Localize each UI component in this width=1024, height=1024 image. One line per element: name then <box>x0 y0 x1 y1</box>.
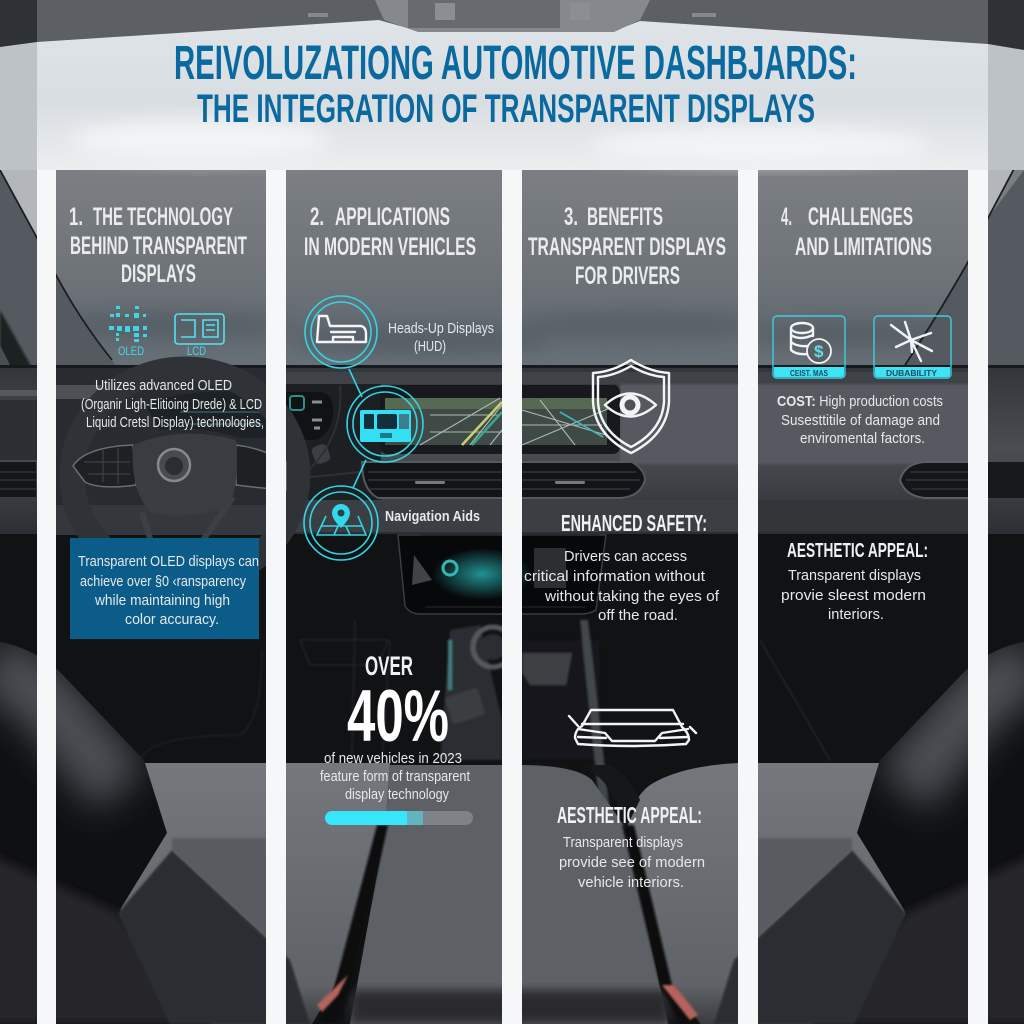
stat: 40 percent: feature form of transparent <box>320 768 471 785</box>
center vent <box>362 462 645 498</box>
heading: challenges <box>781 203 932 261</box>
icon: OLED: OLED <box>118 344 144 358</box>
text: aesthetic appeal: provie sleest modern <box>781 587 926 604</box>
heading: technology: THE TECHNOLOGY <box>93 203 233 231</box>
text: cost: enviromental factors. <box>800 430 925 447</box>
stat: 40 percent: OVER <box>365 651 413 681</box>
right seat cushion <box>627 763 905 1024</box>
heading: benefits: BENEFITS <box>587 203 663 231</box>
heading: technology: 1. <box>69 203 83 231</box>
text: enhanced safety: ENHANCED SAFETY: <box>561 510 707 536</box>
icon: LCD: LCD <box>187 344 206 358</box>
label: heads-up displays: (HUD) <box>414 338 446 355</box>
heading: applications: APPLICATIONS <box>335 203 450 231</box>
icon: OLED <box>109 306 147 358</box>
panel: the technology <box>69 203 264 639</box>
callout: OLED transparency: achieve over §0 ‹ransparency <box>80 573 246 590</box>
side vents <box>0 462 1024 498</box>
right pillar <box>890 170 1024 440</box>
heading: technology <box>69 203 247 288</box>
text: cost: Susesttitile of damage and <box>781 412 940 429</box>
icon: shield with eye <box>593 360 669 453</box>
text: technology description: Liquid Cretsl Display) technologies, <box>86 414 264 431</box>
left seat back <box>0 640 310 1024</box>
heading: benefits: FOR DRIVERS <box>575 262 680 290</box>
heading: benefits <box>528 203 726 290</box>
text: technology description: Utilizes advanced OLED <box>95 377 232 394</box>
heading: applications: IN MODERN VEHICLES <box>304 233 476 261</box>
text: enhanced safety: without taking the eyes of <box>544 588 720 605</box>
heading: applications <box>304 203 476 261</box>
stat: 40 percent: 40% <box>347 676 449 757</box>
label: navigation aids: Navigation Aids <box>385 508 480 525</box>
panel: challenges <box>773 203 951 623</box>
label: heads-up displays <box>388 320 494 355</box>
text: technology description <box>81 377 264 431</box>
callout: OLED transparency: while maintaining high <box>94 592 230 609</box>
icon: cost coins <box>773 316 845 378</box>
text: cost <box>777 393 943 447</box>
text: aesthetic appeal: provide see of modern <box>559 854 705 871</box>
callout: OLED transparency: color accuracy. <box>125 611 219 628</box>
lower center screen <box>398 535 606 614</box>
main screen <box>380 385 620 454</box>
icon: heads-up display <box>305 296 377 368</box>
heading: applications: 2. <box>310 203 324 231</box>
instrument cluster <box>145 385 380 478</box>
text: enhanced safety: Drivers can access <box>564 548 687 565</box>
windshield top band <box>0 0 1024 170</box>
panel: applications <box>304 203 494 825</box>
left pillar <box>0 170 125 440</box>
outer side windows <box>0 170 37 240</box>
text: aesthetic appeal: Transparent displays <box>563 834 683 851</box>
text: technology description: (Organir Ligh-Elitioing Drede) & LCD <box>81 396 262 413</box>
text: aesthetic appeal <box>781 540 928 623</box>
seat belt tabs <box>317 975 348 1012</box>
windshield sky <box>0 170 1024 370</box>
text: aesthetic appeal <box>557 802 705 891</box>
icon: durability crack <box>874 316 951 378</box>
steering wheel <box>72 369 298 581</box>
stat: 40 percent: of new vehicles in 2023 <box>324 750 462 767</box>
heading: challenges: 4. <box>781 203 792 231</box>
text: cost: COST: High production costs <box>777 393 943 410</box>
callout: OLED transparency: Transparent OLED displays can <box>78 553 259 570</box>
heading: challenges: AND LIMITATIONS <box>795 233 932 261</box>
icon: navigation map <box>304 486 378 560</box>
heading: technology: BEHIND TRANSPARENT <box>70 232 247 260</box>
connector lines <box>349 369 366 488</box>
stat: 40 percent: display technology <box>345 786 449 803</box>
text: aesthetic appeal: AESTHETIC APPEAL: <box>787 540 928 562</box>
icon: cost coins: $ <box>814 342 824 361</box>
dashboard <box>0 366 1024 534</box>
heading: technology: DISPLAYS <box>121 260 196 288</box>
text: enhanced safety <box>524 510 720 624</box>
text: aesthetic appeal: AESTHETIC APPEAL: <box>557 802 702 828</box>
label: heads-up displays: Heads-Up Displays <box>388 320 494 337</box>
text: aesthetic appeal: vehicle interiors. <box>578 874 684 891</box>
roof and mirror <box>37 0 988 44</box>
icon: durability crack: DUBABILITY <box>886 368 937 378</box>
progress bar <box>325 811 473 825</box>
center console <box>350 765 668 1024</box>
stat: 40 percent <box>320 651 471 803</box>
icon: cost coins: CEIST. MAS <box>790 368 828 378</box>
text: enhanced safety: off the road. <box>598 607 678 624</box>
icon: LCD <box>175 314 224 358</box>
right seat back <box>714 640 1024 1024</box>
callout: OLED transparency <box>70 538 259 639</box>
white gutters between panels <box>37 170 988 1024</box>
heading: benefits: 3. <box>564 203 578 231</box>
icon: dashboard display <box>347 386 423 462</box>
icon: car front <box>569 710 696 746</box>
panel: benefits <box>524 203 726 891</box>
text: aesthetic appeal: Transparent displays <box>788 567 921 584</box>
text: enhanced safety: critical information without <box>524 568 706 585</box>
text: aesthetic appeal: interiors. <box>828 606 884 623</box>
console and shifter <box>140 620 830 830</box>
heading: benefits: TRANSPARENT DISPLAYS <box>528 233 726 261</box>
title <box>174 37 857 131</box>
heading: challenges: CHALLENGES <box>808 203 913 231</box>
left seat cushion <box>120 763 390 1024</box>
